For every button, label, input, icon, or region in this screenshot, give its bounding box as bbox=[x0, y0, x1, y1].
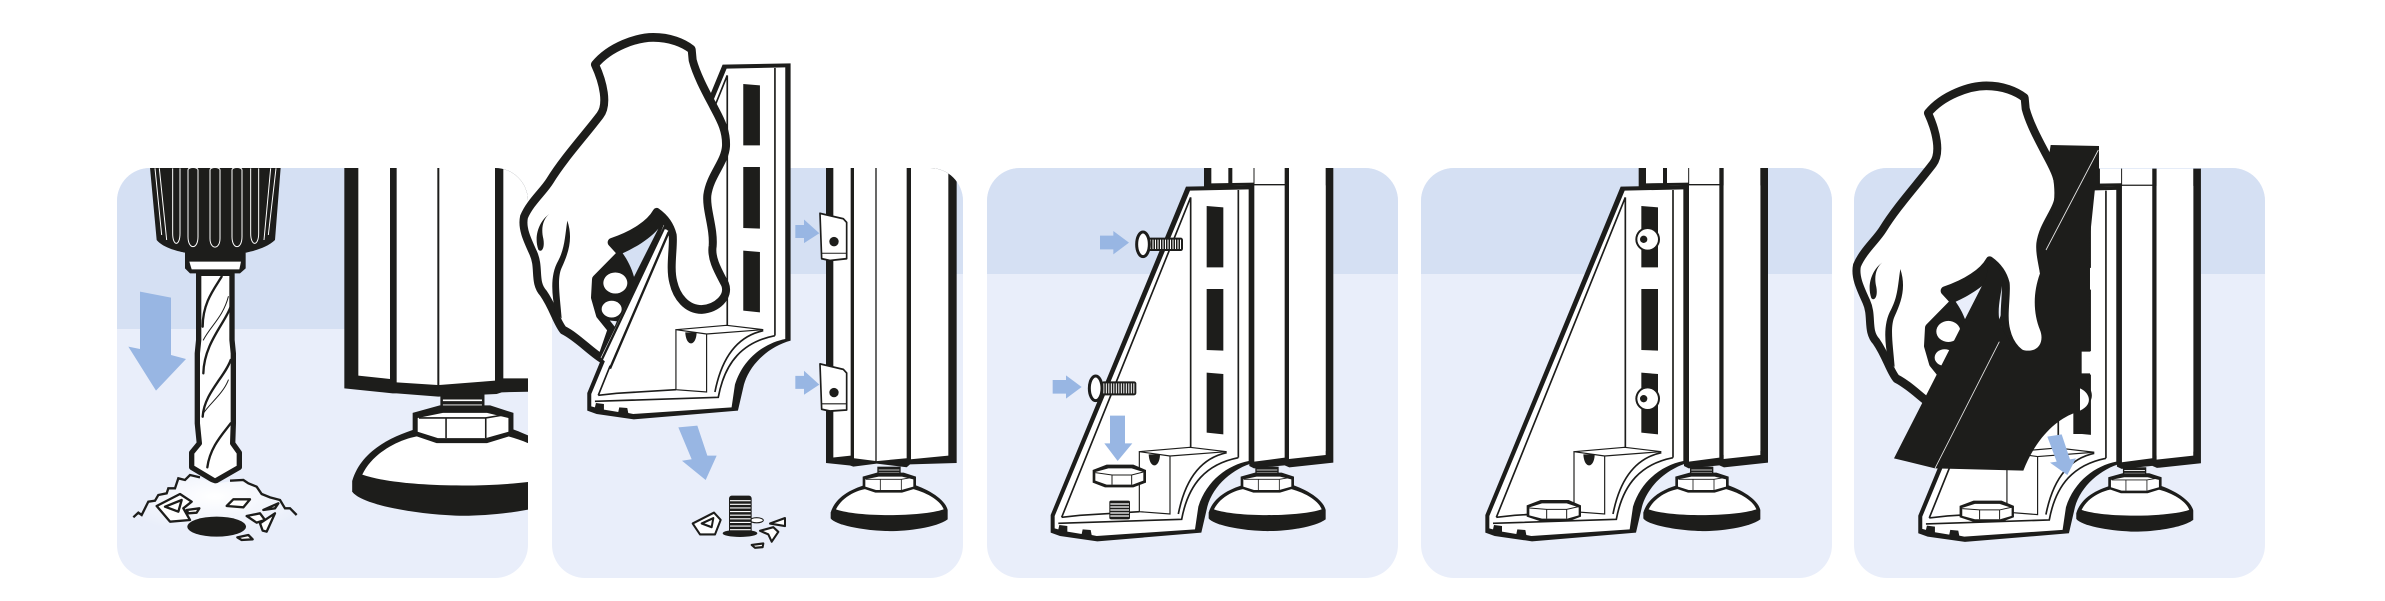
enlarged machine leg bbox=[344, 168, 530, 397]
upper screw bbox=[1137, 232, 1183, 257]
upper wall band bbox=[117, 168, 344, 329]
panel background bbox=[987, 274, 1398, 578]
debris pile and hole bbox=[133, 475, 297, 540]
lower screw bbox=[1089, 376, 1136, 401]
panel 5: attaching the cover bbox=[1854, 168, 2265, 578]
drill chuck and bit bbox=[150, 167, 281, 481]
foot bbox=[831, 467, 948, 531]
assembly with screws bbox=[1051, 168, 1333, 541]
panel 2: positioning the bracket bbox=[552, 166, 963, 578]
fastened assembly bbox=[1485, 168, 1768, 541]
panel 4: fastened bracket bbox=[1421, 168, 1832, 578]
upper washer head bbox=[1635, 227, 1660, 252]
machine leg with T-nuts bbox=[820, 166, 957, 467]
panel background bbox=[1421, 274, 1832, 578]
down-right arrow bbox=[2047, 434, 2076, 475]
assembly under the cover bbox=[1918, 169, 2201, 542]
black cover plate bbox=[1894, 145, 2099, 475]
down arrow bbox=[128, 292, 186, 391]
panel 3: inserting screws and nut bbox=[987, 168, 1398, 578]
panel background bbox=[552, 274, 963, 578]
bracket held in panel 2 bbox=[587, 63, 791, 419]
panel background bbox=[1854, 274, 2265, 578]
T-nut arrows bbox=[678, 220, 819, 480]
upper wall band bbox=[1421, 168, 1832, 274]
upper wall band bbox=[987, 168, 1398, 274]
panel background bbox=[117, 329, 528, 578]
upper wall band bbox=[1854, 168, 2265, 274]
lower washer head bbox=[1635, 386, 1660, 411]
hex nut bbox=[1960, 501, 2014, 522]
hand holding the bracket bbox=[523, 37, 726, 369]
panel 1: drilling the floor bbox=[117, 168, 528, 578]
fastened hex nut bbox=[1527, 500, 1581, 521]
threaded stud bbox=[1109, 501, 1130, 519]
floating hex nut bbox=[1093, 465, 1146, 487]
enlarged foot bbox=[352, 394, 528, 516]
upper wall band bbox=[790, 168, 963, 274]
threaded stud and debris bbox=[693, 496, 785, 548]
blue arrows bbox=[1053, 231, 1132, 461]
hand holding the cover bbox=[1856, 86, 2059, 407]
